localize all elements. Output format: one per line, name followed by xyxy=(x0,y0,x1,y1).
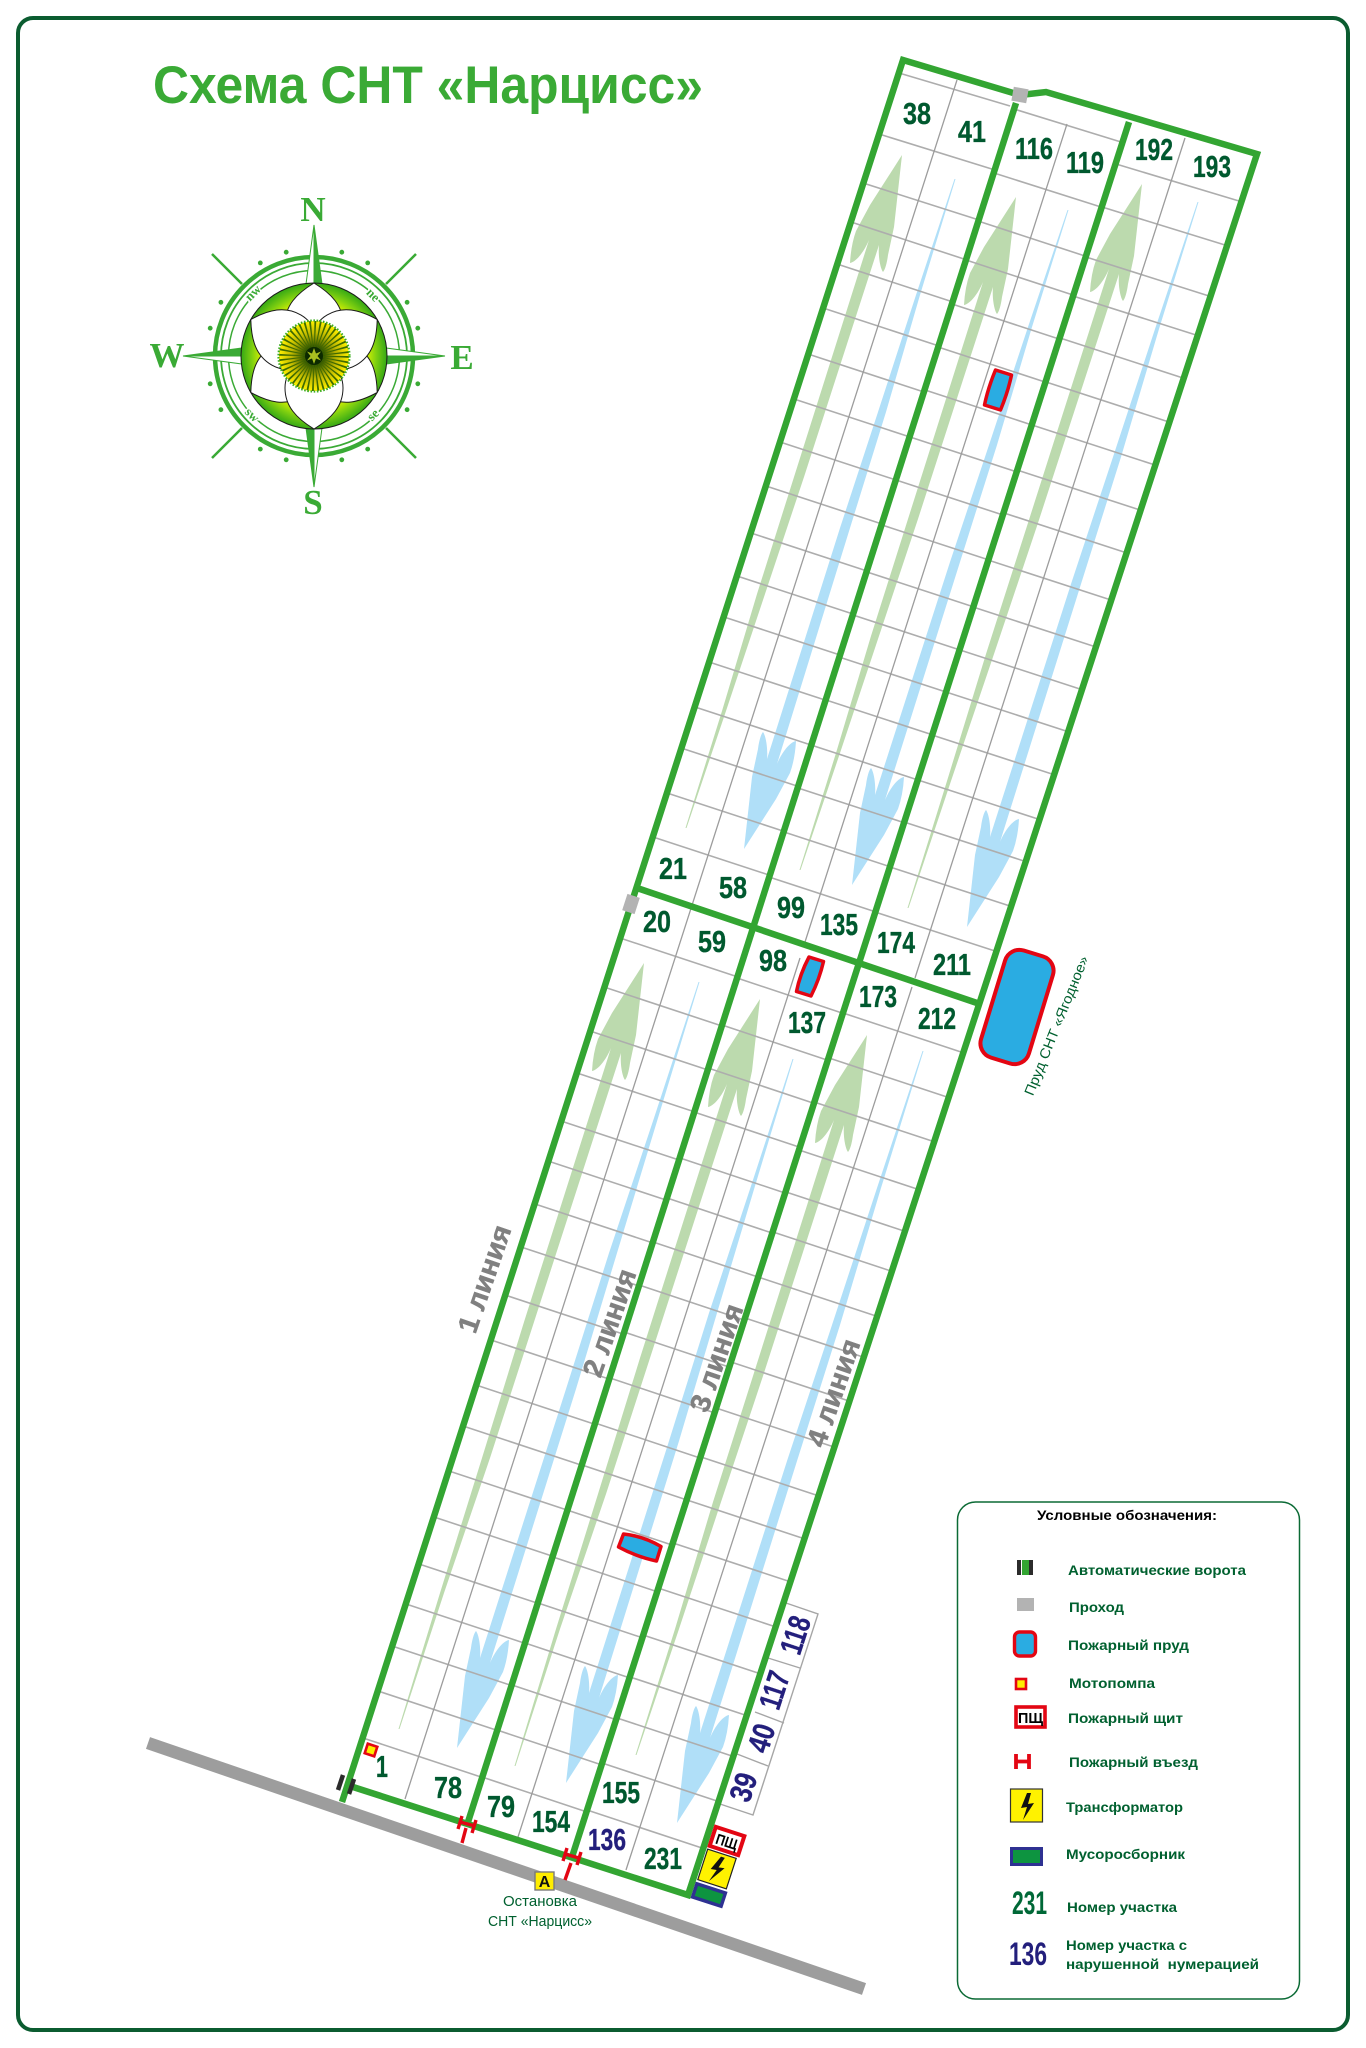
line labels xyxy=(452,1221,866,1451)
compass letters: W xyxy=(150,336,184,375)
compass rings xyxy=(212,254,416,458)
legend: fire entrance xyxy=(1016,1754,1198,1770)
legend panel xyxy=(958,1502,1300,1999)
fire shield sign: ПЩ xyxy=(713,1831,740,1854)
garbage collector xyxy=(693,1884,725,1906)
plot numbers: 38 xyxy=(903,96,931,131)
legend: broken numbering: нарушенной нумерацией xyxy=(1066,1956,1259,1972)
plot numbers: 155 xyxy=(602,1775,640,1810)
legend: garbage collector: Мусоросборник xyxy=(1066,1846,1186,1862)
legend: fire shield xyxy=(1016,1707,1183,1727)
plot rows xyxy=(363,73,1239,1849)
plot numbers: 78 xyxy=(434,1770,462,1805)
legend: fire pond xyxy=(1014,1632,1189,1656)
plot numbers: 137 xyxy=(788,1005,826,1040)
plot numbers with broken numbering: 118 xyxy=(773,1612,818,1659)
direction arrows: exit, blue xyxy=(457,179,1198,1823)
legend: automatic gate: Автоматические ворота xyxy=(1068,1562,1246,1578)
line labels: 3 линия xyxy=(684,1300,749,1416)
plot numbers with broken numbering: 136 xyxy=(588,1822,626,1857)
direction arrows: entry, green xyxy=(398,155,1142,1766)
legend: broken numbering: Номер участка с xyxy=(1066,1937,1187,1953)
compass rose xyxy=(183,225,445,487)
plot numbers: 116 xyxy=(1015,131,1053,166)
compass spikes xyxy=(183,225,445,487)
plot numbers: 193 xyxy=(1193,149,1231,184)
legend: automatic gate xyxy=(1017,1560,1246,1578)
compass letters: S xyxy=(303,483,323,522)
fire entrance 1 xyxy=(458,1816,476,1843)
plot numbers: 99 xyxy=(777,890,805,925)
legend: plot number xyxy=(1012,1885,1177,1921)
legend title: Условные обозначения: xyxy=(1037,1508,1217,1523)
plot numbers xyxy=(376,96,1231,1876)
plot numbers: 154 xyxy=(532,1804,571,1839)
ordinal labels xyxy=(241,281,383,425)
ordinal labels: se xyxy=(364,405,382,424)
plot numbers: 41 xyxy=(958,114,986,149)
bus stop: A xyxy=(539,1874,551,1891)
legend: garbage collector xyxy=(1012,1846,1186,1864)
extra plots beside line 4 xyxy=(720,1603,818,1815)
compass letters: N xyxy=(300,190,326,229)
fire ponds small xyxy=(618,370,1012,1561)
plot numbers: 174 xyxy=(877,925,916,960)
legend: motor pump xyxy=(1016,1675,1155,1691)
title: Схема СНТ «Нарцисс» xyxy=(153,56,703,115)
automatic gate xyxy=(338,1775,354,1794)
plot numbers: 59 xyxy=(698,924,726,959)
line labels: 4 линия xyxy=(801,1335,866,1451)
bus stop xyxy=(488,1872,592,1930)
legend: fire shield: Пожарный щит xyxy=(1068,1710,1183,1726)
legend: passage: Проход xyxy=(1069,1599,1124,1615)
compass letters xyxy=(150,190,474,522)
motor pump xyxy=(365,1744,377,1756)
plot numbers: 231 xyxy=(644,1841,682,1876)
bus stop: СНТ «Нарцисс» xyxy=(488,1913,592,1930)
plot numbers: 58 xyxy=(719,870,747,905)
legend: passage xyxy=(1017,1598,1124,1615)
passage: west xyxy=(622,894,640,914)
ordinal labels: nw xyxy=(241,281,264,304)
flower centre xyxy=(278,320,350,392)
legend: fire pond: Пожарный пруд xyxy=(1068,1637,1189,1653)
legend: plot number: 231 xyxy=(1012,1885,1047,1921)
plot numbers: 135 xyxy=(820,907,858,942)
flower circle xyxy=(241,283,387,429)
pond label: Пруд СНТ «Ягодное» xyxy=(1021,953,1092,1098)
legend: transformer: Трансформатор xyxy=(1066,1799,1183,1815)
plot numbers: 212 xyxy=(918,1001,956,1036)
passage: north xyxy=(1011,87,1029,103)
ordinal labels: sw xyxy=(242,404,263,425)
flower petals xyxy=(236,283,392,429)
legend: plot number: Номер участка xyxy=(1067,1899,1177,1915)
line labels: 1 линия xyxy=(452,1221,517,1337)
legend: broken numbering: 136 xyxy=(1009,1936,1047,1972)
plot numbers: 79 xyxy=(487,1789,515,1824)
plot numbers: 20 xyxy=(643,904,671,939)
plot numbers with broken numbering: 117 xyxy=(752,1667,797,1714)
plot numbers: 173 xyxy=(859,979,897,1014)
pond Yagodnoe xyxy=(977,946,1057,1068)
plot numbers with broken numbering: 39 xyxy=(723,1768,764,1806)
plot column dividers xyxy=(405,80,1185,1870)
legend: transformer xyxy=(1010,1789,1183,1822)
plot numbers: 211 xyxy=(933,947,971,982)
compass letters: E xyxy=(450,338,474,377)
plot numbers: 98 xyxy=(759,943,787,978)
compass dots xyxy=(208,250,420,462)
ordinal labels: ne xyxy=(363,285,383,305)
legend: fire shield: ПЩ xyxy=(1018,1710,1044,1727)
plot numbers: 21 xyxy=(659,851,687,886)
legend: motor pump: Мотопомпа xyxy=(1069,1675,1155,1691)
plot numbers with broken numbering xyxy=(588,1612,818,1857)
plot numbers: 192 xyxy=(1135,132,1173,167)
fire entrance 2 xyxy=(563,1848,581,1880)
road xyxy=(148,1743,864,1989)
legend: broken numbering xyxy=(1009,1936,1259,1972)
plot grid xyxy=(363,73,1239,1870)
line labels: 2 линия xyxy=(577,1265,642,1381)
plot numbers: 119 xyxy=(1066,145,1104,180)
transformer xyxy=(698,1849,736,1889)
bus stop: Остановка xyxy=(503,1893,578,1910)
plot numbers with broken numbering: 40 xyxy=(741,1719,782,1757)
legend: fire entrance: Пожарный въезд xyxy=(1069,1754,1198,1770)
plot numbers: 1 xyxy=(376,1749,388,1784)
boundary roads xyxy=(342,60,1257,1895)
